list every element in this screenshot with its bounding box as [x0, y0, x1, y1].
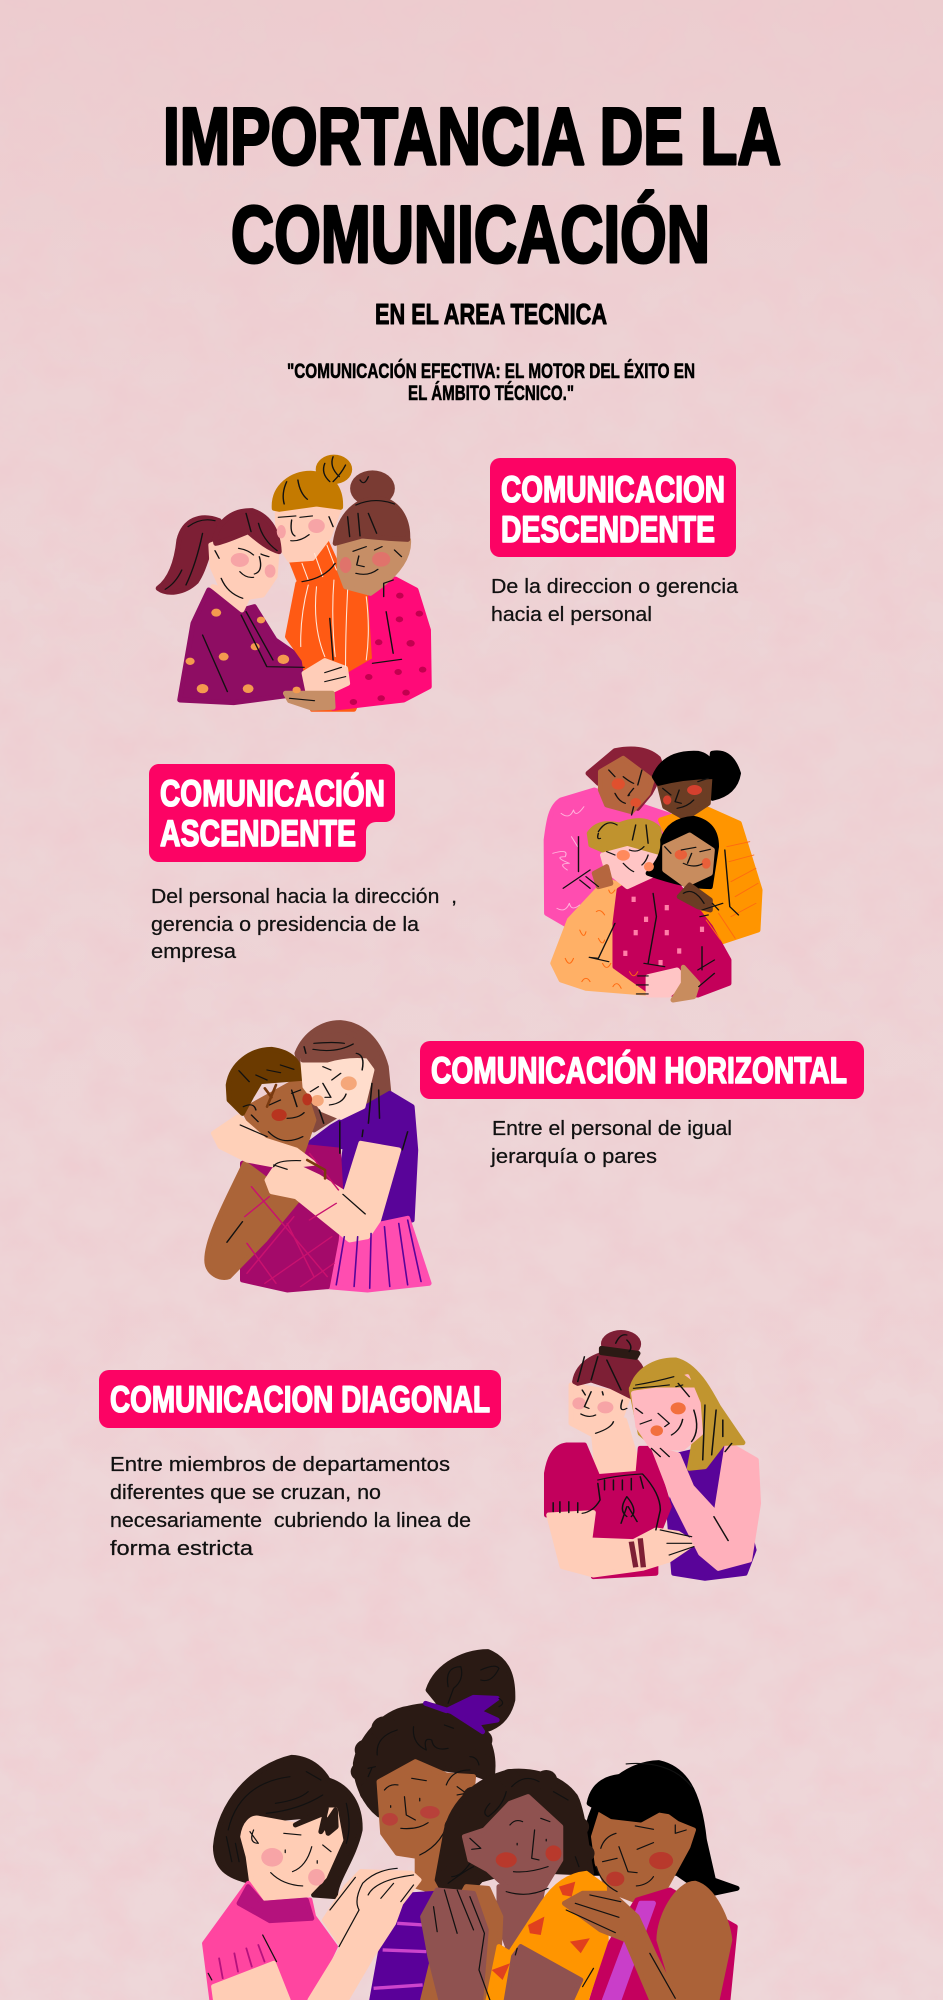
label text: COMUNICACIÓN: [160, 772, 385, 814]
illustration: two friends leaning together: [546, 1330, 759, 1578]
label text: COMUNICACION DIAGONAL: [110, 1379, 490, 1420]
panel: comunicacion descendente: [158, 455, 739, 709]
description: Del personal hacia la dirección ,: [151, 886, 457, 908]
panel: comunicacion horizontal: [207, 1023, 864, 1290]
description: empresa: [151, 941, 237, 963]
panel: comunicacion diagonal: [99, 1330, 759, 1578]
description: [110, 1454, 471, 1560]
label text: ASCENDENTE: [160, 813, 356, 854]
label text: [501, 469, 725, 550]
description: [151, 886, 457, 963]
label text: COMUNICACION: [501, 469, 725, 510]
description: gerencia o presidencia de la: [151, 914, 420, 936]
title: COMUNICACIÓN: [231, 189, 710, 280]
quote: EL ÁMBITO TÉCNICO.": [408, 382, 574, 405]
title: [163, 92, 781, 280]
description: necesariamente cubriendo la linea de: [110, 1510, 471, 1532]
description: diferentes que se cruzan, no: [110, 1482, 381, 1504]
label text: DESCENDENTE: [501, 509, 715, 550]
subtitle: EN EL AREA TECNICA: [375, 299, 607, 331]
description: jerarquía o pares: [490, 1146, 657, 1168]
label text: [160, 772, 385, 854]
description: [491, 576, 739, 626]
description: Entre miembros de departamentos: [110, 1454, 450, 1476]
label box: [149, 764, 395, 862]
quote: [287, 359, 695, 405]
woman with curly hair: [423, 1769, 677, 2000]
description: Entre el personal de igual: [492, 1118, 732, 1140]
label box: [420, 1041, 864, 1099]
woman with short bob: [205, 1757, 419, 2000]
panel: comunicacion ascendente: [149, 749, 760, 1000]
description: De la direccion o gerencia: [491, 576, 739, 598]
description: forma estricta: [110, 1538, 254, 1560]
illustration: four friends hugging: [546, 749, 760, 1000]
illustration: four friends at the bottom: [205, 1652, 737, 2000]
illustration: three friends hugging: [158, 455, 429, 709]
quote: "COMUNICACIÓN EFECTIVA: EL MOTOR DEL ÉXITO EN: [287, 359, 695, 383]
description: [490, 1118, 732, 1168]
label box: [99, 1370, 501, 1428]
woman with black hair: [586, 1763, 737, 2000]
illustration: two people embracing: [207, 1023, 429, 1290]
label box: [490, 458, 736, 557]
description: hacia el personal: [491, 604, 652, 626]
woman with curly bun: [351, 1652, 513, 2000]
